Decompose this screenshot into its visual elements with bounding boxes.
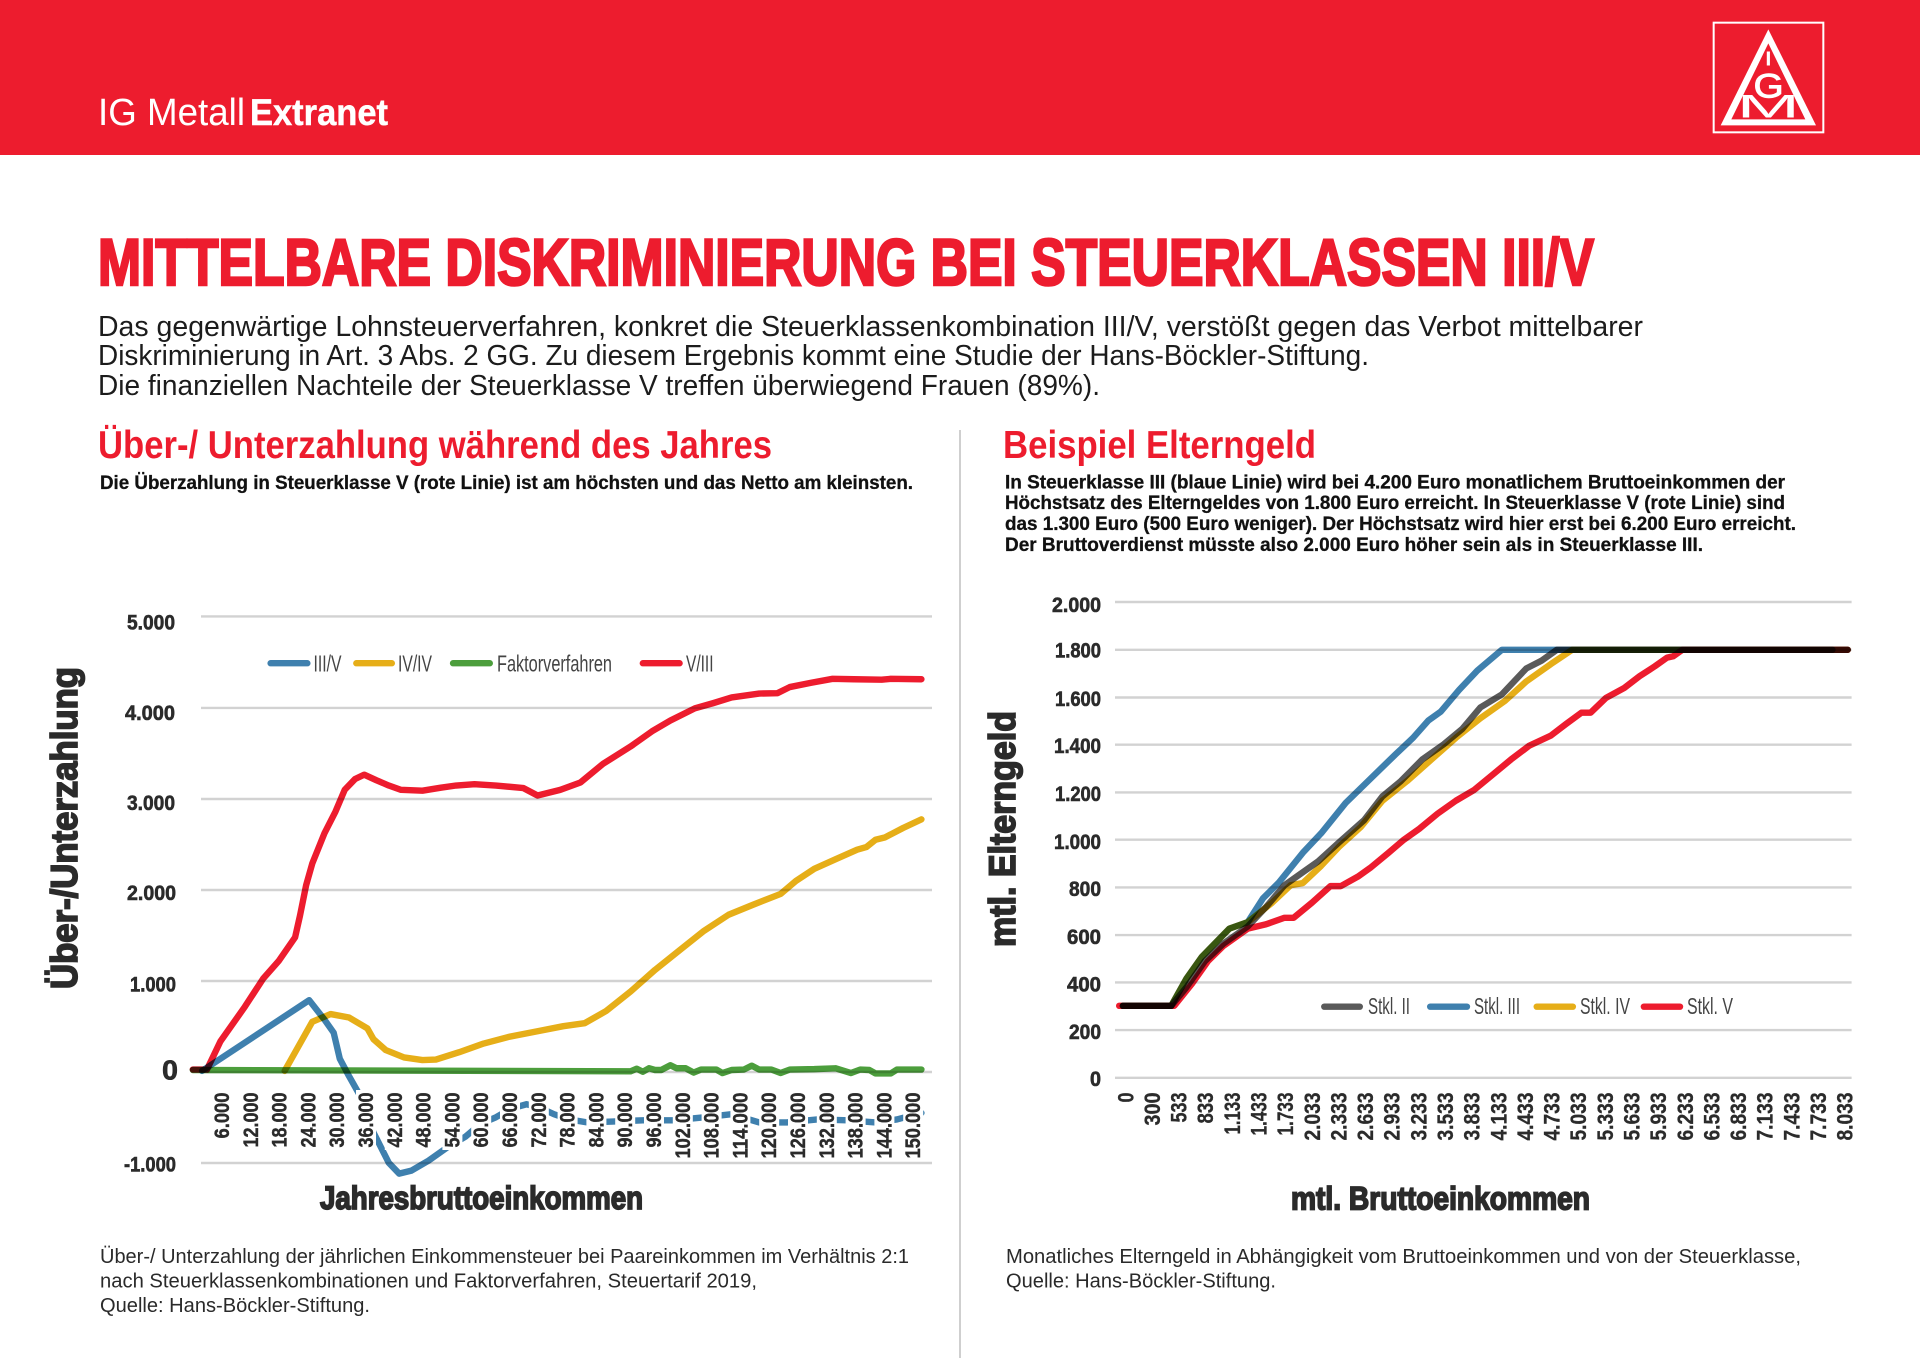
legend <box>1324 993 1733 1019</box>
x axis labels: 132.000 <box>816 1092 839 1158</box>
left caption: Quelle: Hans-Böckler-Stiftung. <box>100 1295 370 1317</box>
y axis labels: 3.000 <box>127 792 175 815</box>
x axis labels: 120.000 <box>758 1092 781 1158</box>
y axis labels: 1.000 <box>130 974 176 996</box>
series lines <box>193 679 921 1174</box>
x axis labels: 108.000 <box>701 1092 724 1158</box>
x axis labels: 5.633 <box>1620 1092 1644 1140</box>
x axis labels: 4.733 <box>1540 1092 1565 1140</box>
x axis labels <box>211 1092 925 1158</box>
x axis labels: 2.633 <box>1353 1092 1378 1140</box>
x axis labels: 3.233 <box>1406 1092 1431 1140</box>
x axis labels: 90.000 <box>614 1092 637 1148</box>
intro text: Diskriminierung in Art. 3 Abs. 2 GG. Zu diesem Ergebnis kommt eine Studie der Hans-Böckler-Stiftung. <box>98 340 1369 372</box>
x axis labels: 36.000 <box>355 1092 378 1148</box>
x axis labels: 6.533 <box>1699 1092 1724 1140</box>
legend: Faktorverfahren <box>497 650 612 676</box>
left heading: Über-/ Unterzahlung während des Jahres <box>98 424 772 467</box>
y axis labels: 1.800 <box>1055 640 1101 663</box>
x axis labels: 533 <box>1167 1092 1192 1122</box>
panel: left chart section <box>44 424 935 1317</box>
y axis labels: 0 <box>162 1054 178 1086</box>
y axis labels: 400 <box>1067 974 1101 996</box>
x axis labels: 7.133 <box>1753 1092 1778 1140</box>
y axis title: Über-/Unterzahlung <box>44 667 85 989</box>
y axis labels: 600 <box>1067 926 1101 949</box>
y axis labels <box>124 611 178 1176</box>
y axis labels: 800 <box>1069 878 1101 901</box>
right caption: Quelle: Hans-Böckler-Stiftung. <box>1006 1270 1276 1292</box>
y axis title: mtl. Elterngeld <box>982 711 1023 947</box>
y axis labels: 200 <box>1069 1021 1101 1044</box>
line chart: parental allowance <box>982 594 1858 1216</box>
x axis labels: 150.000 <box>902 1092 925 1158</box>
x axis labels: 833 <box>1193 1092 1218 1124</box>
right heading: Beispiel Elterngeld <box>1003 424 1316 467</box>
y axis labels: 4.000 <box>125 702 175 725</box>
x axis labels: 1.733 <box>1273 1092 1298 1136</box>
y axis labels: -1.000 <box>124 1154 176 1176</box>
x axis labels: 6.833 <box>1726 1092 1751 1140</box>
legend: Stkl. V <box>1687 993 1733 1019</box>
x axis labels: 102.000 <box>672 1092 695 1158</box>
x axis title: mtl. Bruttoeinkommen <box>1291 1180 1590 1216</box>
header wordmark <box>98 92 388 134</box>
left caption <box>100 1246 909 1317</box>
legend: IV/IV <box>398 650 432 676</box>
x axis labels: 114.000 <box>729 1092 752 1158</box>
header band <box>0 0 1920 155</box>
x axis labels: 138.000 <box>845 1092 868 1158</box>
x axis labels: 3.533 <box>1433 1092 1458 1140</box>
line chart: over and underpayment <box>44 611 935 1216</box>
legend: Stkl. IV <box>1580 993 1630 1019</box>
header wordmark: Extranet <box>250 92 388 133</box>
header wordmark: IG Metall <box>98 92 245 134</box>
x axis labels: 30.000 <box>326 1092 349 1148</box>
x axis title: Jahresbruttoeinkommen <box>320 1180 643 1216</box>
y axis labels: 1.200 <box>1055 783 1101 806</box>
left caption: Über-/ Unterzahlung der jährlichen Einkommensteuer bei Paareinkommen im Verhältnis 2:1 <box>100 1246 909 1268</box>
x axis labels: 2.933 <box>1380 1092 1405 1140</box>
x axis labels: 5.333 <box>1593 1092 1618 1140</box>
y axis labels <box>1052 594 1101 1091</box>
icon: IG Metall logo <box>1714 23 1823 132</box>
legend <box>271 650 714 676</box>
intro text: Die finanziellen Nachteile der Steuerklasse V treffen überwiegend Frauen (89%). <box>98 370 1100 402</box>
intro text <box>98 311 1643 402</box>
x axis labels: 3.833 <box>1460 1092 1485 1140</box>
icon: IG Metall logo: M <box>1737 87 1800 124</box>
x axis labels: 18.000 <box>269 1092 292 1148</box>
right caption: Monatliches Elterngeld in Abhängigkeit vom Bruttoeinkommen und von der Steuerklasse, <box>1006 1246 1801 1268</box>
x axis labels: 0 <box>1113 1092 1138 1102</box>
y axis labels: 1.600 <box>1055 688 1101 711</box>
icon: IG Metall logo: I <box>1765 47 1771 70</box>
x axis labels: 2.033 <box>1300 1092 1325 1140</box>
x axis labels: 4.133 <box>1486 1092 1511 1140</box>
y axis labels: 1.400 <box>1054 735 1101 758</box>
icon: IG Metall logo: G <box>1754 67 1784 105</box>
x axis labels: 6.000 <box>211 1092 234 1138</box>
y axis labels: 2.000 <box>127 882 176 905</box>
legend: III/V <box>314 650 342 676</box>
y axis labels: 2.000 <box>1052 594 1101 617</box>
intro text: Das gegenwärtige Lohnsteuerverfahren, konkret die Steuerklassenkombination III/V, verstößt gegen das Verbot mittelbarer <box>98 311 1643 343</box>
right description: Der Bruttoverdienst müsste also 2.000 Euro höher sein als in Steuerklasse III. <box>1005 535 1703 556</box>
legend: Stkl. III <box>1474 993 1520 1019</box>
y axis labels: 1.000 <box>1054 831 1101 854</box>
x axis labels: 5.933 <box>1646 1092 1671 1140</box>
x axis labels: 72.000 <box>528 1092 551 1148</box>
panel: right chart section <box>982 424 1858 1292</box>
right description: In Steuerklasse III (blaue Linie) wird bei 4.200 Euro monatlichem Bruttoeinkommen der <box>1005 472 1786 494</box>
left subheading: Die Überzahlung in Steuerklasse V (rote Linie) ist am höchsten und das Netto am kleinsten. <box>100 473 913 494</box>
x axis labels: 5.033 <box>1566 1092 1591 1140</box>
x axis labels: 1.433 <box>1246 1092 1272 1136</box>
x axis labels: 8.033 <box>1833 1092 1858 1140</box>
x axis labels: 6.233 <box>1673 1092 1698 1140</box>
x axis labels: 7.733 <box>1806 1092 1831 1140</box>
x axis labels: 84.000 <box>585 1092 608 1148</box>
x axis labels: 60.000 <box>470 1092 493 1148</box>
x axis labels: 54.000 <box>441 1092 464 1148</box>
x axis labels: 78.000 <box>557 1092 580 1148</box>
x axis labels: 126.000 <box>787 1092 810 1158</box>
y axis labels: 0 <box>1090 1068 1101 1091</box>
x axis labels: 96.000 <box>643 1092 666 1148</box>
series lines <box>1119 650 1848 1006</box>
x axis labels: 66.000 <box>499 1092 522 1148</box>
x axis labels: 4.433 <box>1513 1092 1538 1140</box>
legend: Stkl. II <box>1368 993 1410 1019</box>
x axis labels <box>1113 1092 1858 1140</box>
right description: Höchstsatz des Elterngeldes von 1.800 Euro erreicht. In Steuerklasse V (rote Linie) sind <box>1005 493 1785 514</box>
x axis labels: 1.133 <box>1220 1092 1245 1134</box>
x axis labels: 42.000 <box>384 1092 407 1148</box>
x axis labels: 300 <box>1140 1092 1165 1126</box>
x axis labels: 144.000 <box>873 1092 896 1158</box>
panel divider <box>959 430 961 1358</box>
y axis labels: 5.000 <box>127 611 175 634</box>
left caption: nach Steuerklassenkombinationen und Faktorverfahren, Steuertarif 2019, <box>100 1270 757 1292</box>
legend: V/III <box>686 650 714 676</box>
right caption <box>1006 1246 1801 1292</box>
right description <box>1005 472 1796 556</box>
right description: das 1.300 Euro (500 Euro weniger). Der Höchstsatz wird hier erst bei 6.200 Euro erreicht. <box>1005 514 1796 535</box>
x axis labels: 12.000 <box>240 1092 263 1148</box>
x axis labels: 24.000 <box>297 1092 320 1148</box>
x axis labels: 7.433 <box>1779 1092 1804 1140</box>
x axis labels: 48.000 <box>413 1092 436 1148</box>
x axis labels: 2.333 <box>1326 1092 1351 1140</box>
